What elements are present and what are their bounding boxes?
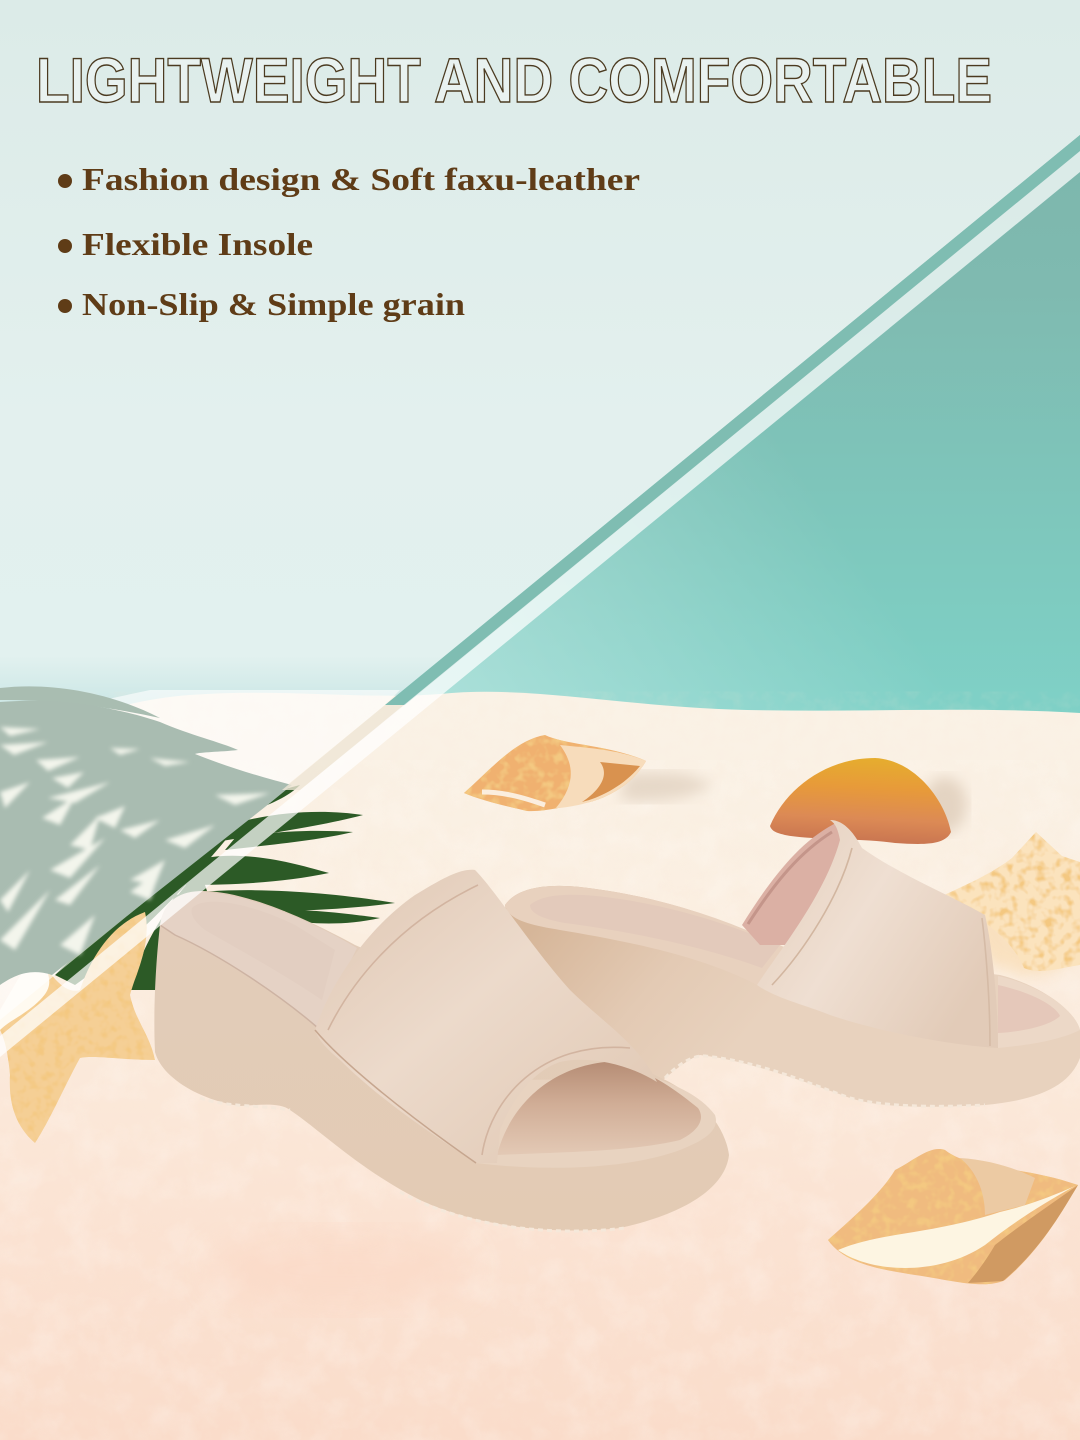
sandal: back right xyxy=(505,820,1080,1107)
translucent veil over sand xyxy=(0,690,400,1020)
translucent stripe tint over sand xyxy=(282,705,405,790)
starfish: right xyxy=(938,832,1080,975)
back sandal rim xyxy=(505,886,790,985)
front sandal footbed xyxy=(160,892,357,1028)
back sandal toe insole xyxy=(998,976,1080,1048)
feature: non-slip: Non-Slip & Simple grain xyxy=(82,286,465,322)
back sandal strap xyxy=(757,820,998,1048)
front sandal strap xyxy=(315,870,657,1163)
back sandal strap lining xyxy=(742,822,842,945)
teal diagonal stripe xyxy=(385,135,1080,705)
pale diagonal stripe xyxy=(0,151,1080,1057)
teal wall background xyxy=(0,0,1080,720)
pale palm leaf seen through veil xyxy=(0,686,292,985)
back sandal footbed xyxy=(530,895,780,968)
back sandal sole xyxy=(505,886,1080,1107)
palm leaf xyxy=(55,785,395,990)
sand ground xyxy=(0,692,1080,1440)
feature list xyxy=(58,161,640,322)
front sandal sole xyxy=(154,891,729,1231)
front sandal toe platform xyxy=(476,1078,716,1168)
starfish: left xyxy=(0,912,155,1143)
feature: fashion design: Fashion design & Soft faxu-leather xyxy=(82,161,640,197)
front sandal toe insole xyxy=(497,1062,701,1155)
sandal: front left xyxy=(154,870,729,1231)
pale upper-left wall panel xyxy=(0,0,1080,705)
seashell: bottom conch xyxy=(828,1149,1078,1284)
feature: flexible insole: Flexible Insole xyxy=(82,226,313,262)
seashell: top conch xyxy=(464,735,712,811)
seashell: clam xyxy=(770,758,967,844)
